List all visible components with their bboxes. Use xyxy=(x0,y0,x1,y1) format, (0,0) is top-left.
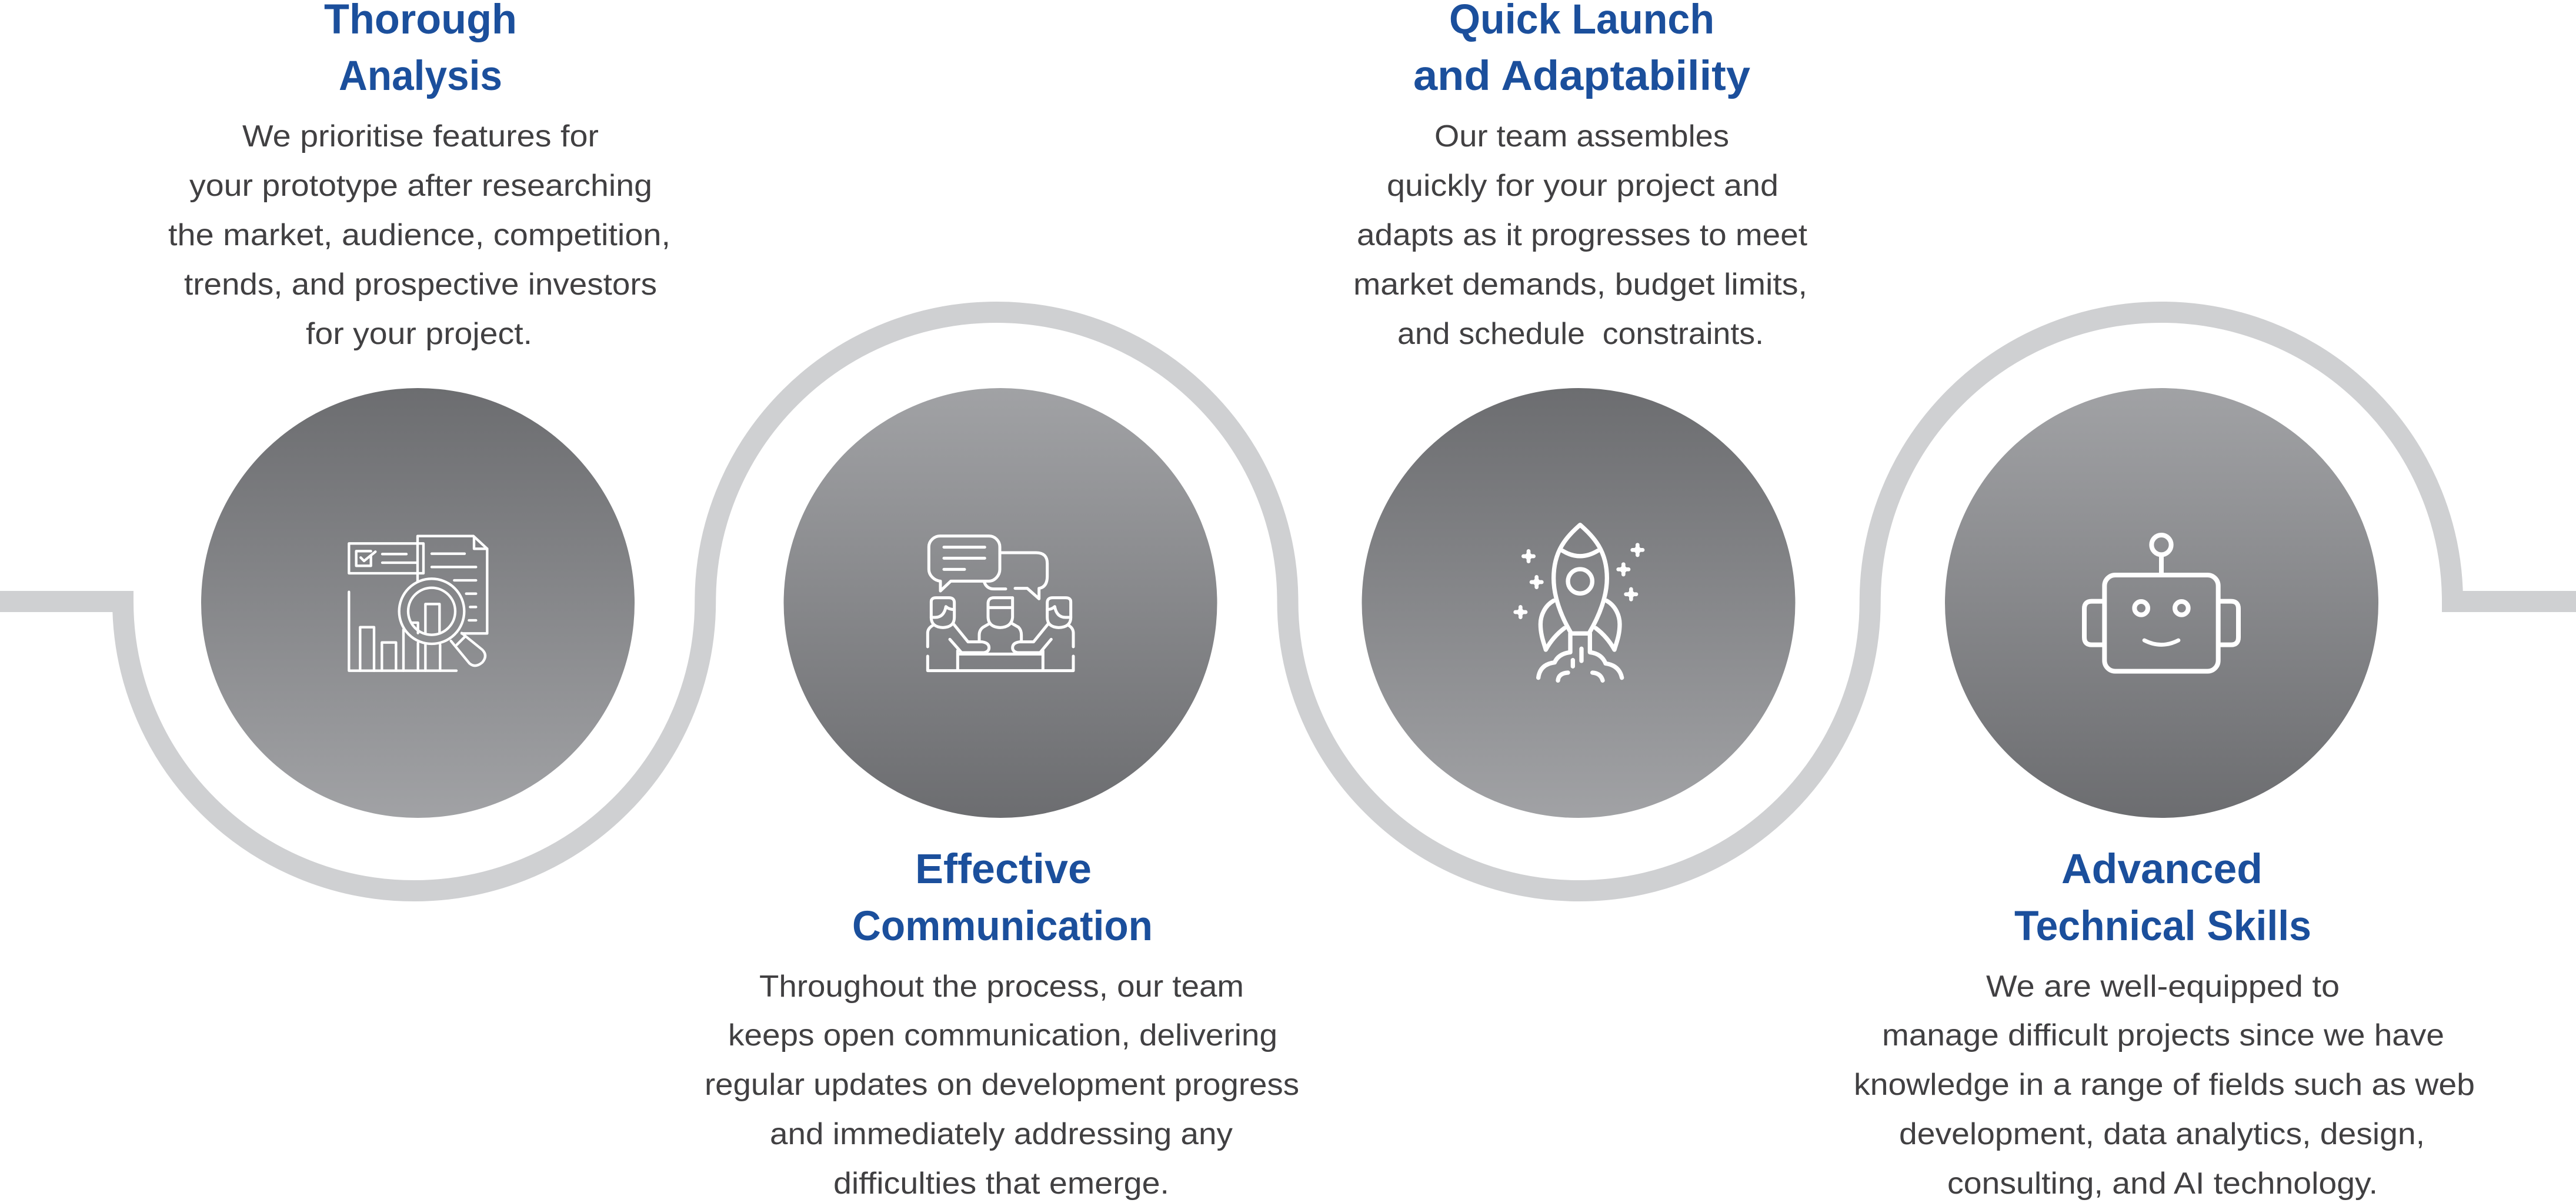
text block: Effective Communication xyxy=(705,846,1299,1201)
body text: Advanced Technical Skills: manage difficult projects since we have xyxy=(1882,1018,2444,1052)
heading: Effective Communication: Communication xyxy=(852,903,1153,950)
serpentine connector line xyxy=(0,312,2576,891)
icon: rocket launch xyxy=(1516,525,1643,680)
heading: Quick Launch and Adaptability: and Adaptability xyxy=(1413,53,1751,99)
circle 3 xyxy=(1362,388,1795,818)
body text: Effective Communication: difficulties that emerge. xyxy=(833,1167,1169,1201)
heading: Effective Communication xyxy=(852,846,1153,950)
body text: Quick Launch and Adaptability: market demands, budget limits, xyxy=(1353,268,1807,302)
body text: Advanced Technical Skills: consulting, and AI technology. xyxy=(1947,1167,2378,1201)
body text: Effective Communication: and immediately addressing any xyxy=(770,1117,1233,1151)
heading: Quick Launch and Adaptability xyxy=(1413,0,1751,99)
heading: Effective Communication: Effective xyxy=(915,846,1092,893)
heading: Advanced Technical Skills: Technical Skills xyxy=(2014,903,2311,950)
body text: Advanced Technical Skills xyxy=(1854,970,2475,1201)
text block: Advanced Technical Skills xyxy=(1854,846,2475,1201)
circle 2 xyxy=(783,388,1217,818)
body text: Quick Launch and Adaptability: and schedule constraints. xyxy=(1397,317,1764,351)
body text: Quick Launch and Adaptability: Our team assembles xyxy=(1434,119,1729,153)
body text: Effective Communication: Throughout the process, our team xyxy=(759,970,1244,1004)
body text: Thorough Analysis: the market, audience, competition, xyxy=(168,218,670,252)
text block: Thorough Analysis xyxy=(168,0,670,351)
body text: Quick Launch and Adaptability: adapts as it progresses to meet xyxy=(1357,218,1808,252)
body text: Thorough Analysis xyxy=(168,119,670,351)
body text: Quick Launch and Adaptability: quickly for your project and xyxy=(1387,169,1778,203)
icon: friendly robot head xyxy=(2084,535,2238,671)
body text: Effective Communication: regular updates on development progress xyxy=(705,1068,1299,1102)
circle 1 xyxy=(201,388,635,818)
icon: team conversation xyxy=(927,536,1073,671)
body text: Advanced Technical Skills: We are well-equipped to xyxy=(1986,970,2340,1004)
circle 4 xyxy=(1945,388,2378,818)
heading: Advanced Technical Skills: Advanced xyxy=(2061,846,2263,893)
body text: Thorough Analysis: trends, and prospective investors xyxy=(184,268,657,302)
body text: Effective Communication: keeps open communication, delivering xyxy=(728,1018,1277,1052)
body text: Advanced Technical Skills: development, data analytics, design, xyxy=(1899,1117,2425,1151)
body text: Quick Launch and Adaptability xyxy=(1353,119,1808,351)
body text: Advanced Technical Skills: knowledge in a range of fields such as web xyxy=(1854,1068,2475,1102)
body text: Thorough Analysis: We prioritise features for xyxy=(242,119,599,153)
heading: Advanced Technical Skills xyxy=(2014,846,2311,950)
heading: Thorough Analysis: Analysis xyxy=(339,53,502,99)
icon: report analysis with magnifying glass xyxy=(349,536,487,671)
body text: Thorough Analysis: for your project. xyxy=(306,317,532,351)
body text: Thorough Analysis: your prototype after researching xyxy=(189,169,652,203)
body text: Effective Communication xyxy=(705,970,1299,1201)
heading: Thorough Analysis xyxy=(324,0,517,99)
text block: Quick Launch and Adaptability xyxy=(1353,0,1808,351)
